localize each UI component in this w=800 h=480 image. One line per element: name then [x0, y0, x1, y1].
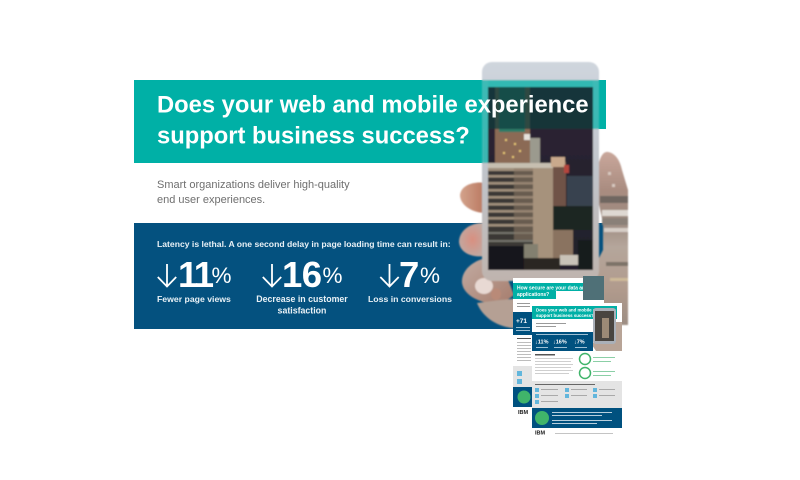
hand: thumb and palm: [520, 152, 628, 325]
back page heading: applications?: [517, 292, 549, 298]
title: support business success?: [157, 122, 470, 150]
stat: 16 percent decrease in customer satisfaction: satisfaction: [278, 306, 326, 316]
subtitle: end user experiences.: [157, 194, 265, 206]
hand: lower finger: [462, 258, 514, 304]
teal overlay on phone screen: [488, 87, 593, 129]
back page intro text: [517, 303, 530, 307]
phone screen with night city: [488, 87, 593, 270]
stat: 7 percent loss in conversions: [368, 254, 452, 304]
front page grey feature panel: [532, 381, 622, 408]
front page intro: [536, 323, 566, 327]
stat: 16 percent decrease in customer satisfaction: 16: [282, 254, 322, 295]
stat: 7 percent loss in conversions: Loss in conversions: [368, 294, 452, 304]
main building: [488, 166, 533, 246]
back page call to action: [513, 387, 532, 407]
hand: middle finger: [459, 223, 486, 256]
stat: 7 percent loss in conversions: %: [420, 263, 440, 288]
back page logo: IBM: [518, 410, 528, 416]
latency statement: Latency is lethal. A one second delay in page loading time can result in:: [157, 239, 451, 249]
back page stat: +71: [516, 318, 527, 325]
back page building image: [583, 276, 604, 300]
front page stats: ↓16%: [553, 340, 567, 346]
front page stats: ↓7%: [574, 340, 585, 346]
stat: 16 percent decrease in customer satisfaction: Decrease in customer: [256, 294, 348, 304]
tower: [495, 87, 530, 167]
fingernail highlight: [475, 278, 493, 294]
front page stats: [532, 332, 593, 351]
back page grey panel: [513, 366, 532, 387]
stat: 11 percent fewer page views: Fewer page views: [157, 294, 231, 304]
front page heading: Does your web and mobile experience: [536, 308, 616, 312]
mini document: back page: [513, 276, 604, 416]
title: [157, 92, 589, 150]
front page stats: ↓11%: [535, 340, 549, 346]
front page text block: [535, 354, 573, 374]
front page heading: [532, 306, 617, 319]
panel: latency statistics: [134, 223, 606, 329]
back page heading: [513, 283, 588, 299]
front page footer text: [555, 433, 613, 434]
subtitle: [157, 179, 350, 206]
front page phone: [592, 308, 622, 351]
stat: 11 percent fewer page views: 11: [178, 254, 214, 295]
front page logo: IBM: [535, 430, 546, 436]
front page call to action: [532, 408, 622, 428]
phone body: [482, 62, 599, 281]
right buildings: [553, 162, 566, 210]
subtitle: Smart organizations deliver high-quality: [157, 179, 350, 191]
mini document: front page: [532, 303, 622, 437]
title band: [134, 80, 606, 163]
hand: palm under phone: [477, 298, 530, 328]
stat: 11 percent fewer page views: [157, 254, 232, 304]
stat: 7 percent loss in conversions: 7: [399, 254, 419, 295]
image: hand holding phone: [459, 62, 628, 328]
title: Does your web and mobile experience: [157, 92, 589, 118]
front page circle captions: [593, 357, 615, 376]
front page heading: support business success?: [536, 313, 594, 318]
back page list: [517, 338, 531, 361]
stat: 11 percent fewer page views: %: [212, 263, 232, 288]
front page circles: [580, 354, 590, 378]
hand: upper finger: [460, 182, 486, 213]
thumb city reflection: [600, 172, 628, 281]
back page heading: How secure are your data and: [517, 286, 588, 292]
stat: 16 percent decrease in customer satisfaction: [256, 254, 348, 316]
stat: 16 percent decrease in customer satisfaction: %: [322, 263, 343, 288]
